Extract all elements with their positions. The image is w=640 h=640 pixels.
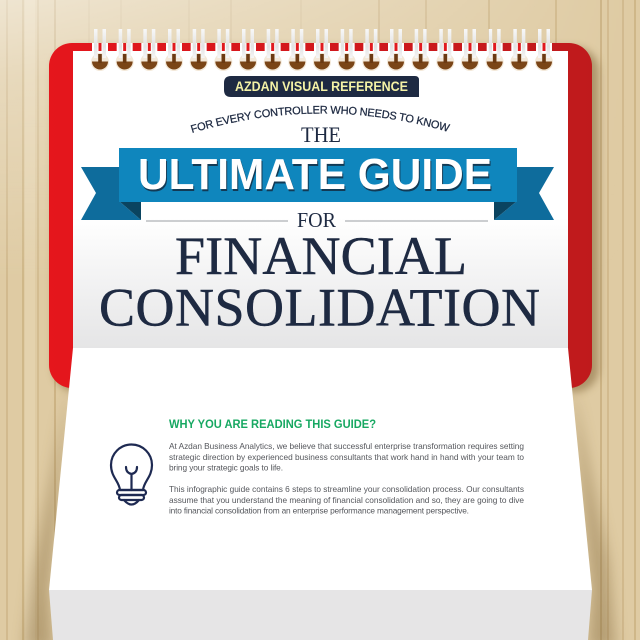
heading: The: THE — [301, 122, 341, 147]
heading: Financial Consolidation — [99, 226, 540, 338]
red calendar backing — [49, 43, 592, 388]
heading: Financial Consolidation: FINANCIAL — [175, 226, 467, 286]
body text: into financial consolidation from an enterprise performance management perspective. — [169, 506, 469, 516]
heading: Ultimate Guide: ULTIMATE GUIDE — [138, 150, 492, 199]
heading: Ultimate Guide: ULTIMATE GUIDE — [139, 152, 493, 201]
lower page bottom fold — [49, 590, 592, 640]
upper white page — [73, 51, 568, 348]
badge: Azdan Visual Reference: AZDAN VISUAL REFERENCE — [235, 79, 408, 94]
heading: Financial Consolidation: CONSOLIDATION — [99, 278, 540, 338]
icon: light bulb — [111, 444, 152, 504]
spiral binding — [91, 29, 553, 71]
heading: For: FOR — [297, 208, 336, 232]
card shadow — [53, 47, 599, 392]
body text: bring your strategic goals to life. — [169, 462, 283, 472]
lower fold-out page — [49, 348, 592, 590]
curved subtitle: FOR EVERY CONTROLLER WHO NEEDS TO KNOW — [190, 106, 450, 133]
paper shadow on wood — [24, 380, 616, 640]
body text: This infographic guide contains 6 steps to streamline your consolidation process. Our consultants — [169, 484, 524, 494]
section heading: WHY YOU ARE READING THIS GUIDE? — [169, 419, 376, 431]
body text: strategic direction by experienced business consultants that work hand in hand with your team to — [169, 452, 524, 462]
ribbon banner — [81, 148, 554, 220]
body text — [169, 441, 524, 516]
badge: Azdan Visual Reference — [224, 76, 419, 97]
body text: assume that you understand the meaning of financial consolidation and so, they are going to dive — [169, 495, 524, 505]
body text: At Azdan Business Analytics, we believe that successful enterprise transformation requires setting — [169, 441, 524, 451]
